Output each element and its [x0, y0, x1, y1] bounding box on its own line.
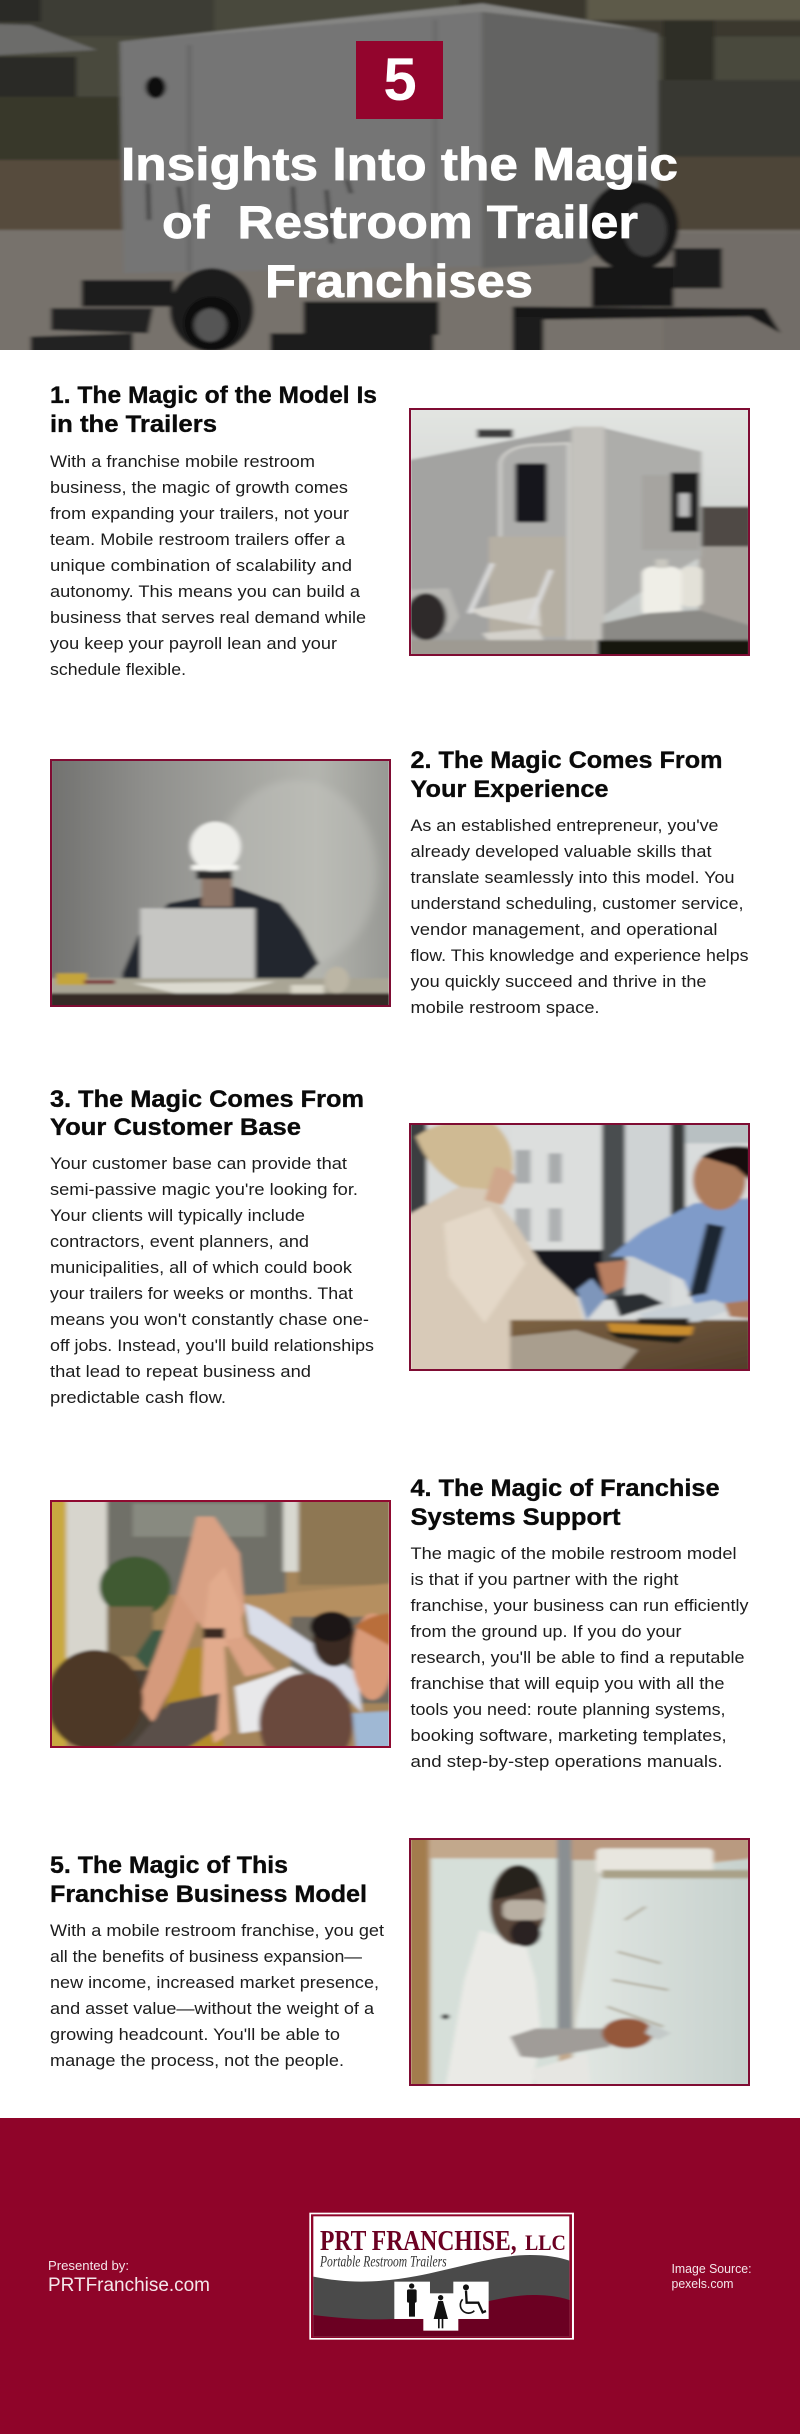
body text 3: Your clients will typically include — [50, 1207, 305, 1225]
hero background photo: restroom trailer — [0, 0, 800, 370]
body text 4 — [410, 1545, 749, 1771]
body text 5: manage the process, not the people. — [50, 2052, 344, 2070]
body text 1: unique combination of scalability and — [50, 557, 352, 575]
body text 5: all the benefits of business expansion— — [50, 1948, 363, 1966]
body text 1: autonomy. This means you can build a — [50, 583, 361, 601]
body text 4: The magic of the mobile restroom model — [410, 1545, 736, 1563]
panel: section 2 — [33, 747, 748, 1020]
number badge: 5 — [383, 46, 417, 113]
body text 5: With a mobile restroom franchise, you get — [50, 1922, 384, 1940]
heading 3: 3. The Magic Comes From — [50, 1086, 364, 1113]
body text 1: schedule flexible. — [50, 661, 186, 679]
body text 2 — [410, 817, 748, 1017]
body text 5: new income, increased market presence, — [50, 1974, 379, 1992]
presented by text: PRTFranchise.com — [48, 2275, 210, 2296]
body text 3: contractors, event planners, and — [50, 1233, 309, 1251]
icon: woman — [423, 2293, 458, 2331]
heading 2 — [410, 747, 722, 803]
body text 3: Your customer base can provide that — [50, 1155, 347, 1173]
photo: man in hard hat at laptop — [50, 759, 391, 1007]
presented by text — [48, 2258, 210, 2296]
body text 3: means you won't constantly chase one- — [50, 1311, 369, 1329]
heading 1 — [50, 382, 377, 438]
body text 2: mobile restroom space. — [410, 999, 600, 1017]
logo: PRT Franchise: Portable Restroom Trailers — [319, 2254, 447, 2271]
panel: section 3 — [50, 1086, 765, 1407]
heading 5 — [50, 1852, 367, 1908]
body text 1: team. Mobile restroom trailers offer a — [50, 531, 346, 549]
logo: PRT Franchise: PRT FRANCHISE, — [320, 2226, 517, 2257]
heading 1: 1. The Magic of the Model Is — [50, 382, 377, 409]
body text 2: already developed valuable skills that — [410, 843, 712, 861]
body text 1: business that serves real demand while — [50, 609, 366, 627]
footer band — [0, 2118, 800, 2434]
number badge — [356, 41, 443, 119]
body text 1: With a franchise mobile restroom — [50, 453, 315, 471]
body text 2: flow. This knowledge and experience helps — [410, 947, 748, 965]
heading 5: 5. The Magic of This — [50, 1852, 288, 1879]
photo: man writing on whiteboard — [409, 1838, 750, 2086]
image source text: Image Source: — [672, 2261, 752, 2276]
body text 4: franchise that will equip you with all the — [410, 1675, 724, 1693]
heading 5: Franchise Business Model — [50, 1881, 367, 1908]
hero banner — [0, 0, 800, 370]
heading 4 — [410, 1475, 720, 1531]
body text 4: research, you'll be able to find a reputable — [410, 1649, 744, 1667]
body text 5 — [50, 1922, 384, 2070]
heading 1: in the Trailers — [50, 411, 217, 438]
panel: section 4 — [33, 1475, 749, 1773]
body text 1: business, the magic of growth comes — [50, 479, 348, 497]
body text 1 — [50, 453, 366, 679]
body text 2: you quickly succeed and thrive in the — [410, 973, 706, 991]
body text 5: growing headcount. You'll be able to — [50, 2026, 340, 2044]
title: of Restroom Trailer — [162, 196, 638, 248]
heading 2: Your Experience — [410, 776, 608, 803]
body text 3: off jobs. Instead, you'll build relationships — [50, 1337, 374, 1355]
panel: section 5 — [50, 1828, 765, 2097]
icon: man — [394, 2282, 430, 2319]
body text 4: tools you need: route planning systems, — [410, 1701, 726, 1719]
body text 4: and step-by-step operations manuals. — [410, 1753, 722, 1771]
title: Insights Into the Magic — [121, 138, 678, 190]
title: Franchises — [265, 255, 533, 307]
logo: PRT Franchise: LLC — [525, 2230, 566, 2255]
body text 1: you keep your payroll lean and your — [50, 635, 338, 653]
icon: wheelchair — [453, 2282, 489, 2319]
photo: silver restroom trailer — [409, 408, 750, 656]
body text 4: franchise, your business can run efficiently — [410, 1597, 749, 1615]
body text 2: understand scheduling, customer service, — [410, 895, 744, 913]
panel: section 1 — [50, 382, 765, 679]
heading 4: 4. The Magic of Franchise — [410, 1475, 720, 1502]
body text 2: vendor management, and operational — [410, 921, 718, 939]
body text 3: predictable cash flow. — [50, 1389, 226, 1407]
photo: team high five — [50, 1500, 391, 1748]
photo: business handshake — [409, 1123, 750, 1371]
heading 3: Your Customer Base — [50, 1114, 301, 1141]
body text 3: municipalities, all of which could book — [50, 1259, 353, 1277]
body text 4: from the ground up. If you do your — [410, 1623, 682, 1641]
heading 4: Systems Support — [410, 1504, 620, 1531]
body text 3: semi-passive magic you're looking for. — [50, 1181, 358, 1199]
title — [121, 138, 678, 307]
heading 2: 2. The Magic Comes From — [410, 747, 722, 774]
body text 4: booking software, marketing templates, — [410, 1727, 726, 1745]
logo: PRT Franchise — [309, 2213, 574, 2340]
body text 1: from expanding your trailers, not your — [50, 505, 350, 523]
body text 2: As an established entrepreneur, you've — [410, 817, 718, 835]
presented by text: Presented by: — [48, 2258, 129, 2273]
body text 3 — [50, 1155, 374, 1407]
body text 4: is that if you partner with the right — [410, 1571, 679, 1589]
image source text — [672, 2261, 752, 2291]
body text 3: your trailers for weeks or months. That — [50, 1285, 353, 1303]
body text 2: translate seamlessly into this model. You — [410, 869, 734, 887]
image source text: pexels.com — [672, 2276, 734, 2291]
body text 3: that lead to repeat business and — [50, 1363, 311, 1381]
body text 5: and asset value—without the weight of a — [50, 2000, 375, 2018]
heading 3 — [50, 1086, 364, 1141]
